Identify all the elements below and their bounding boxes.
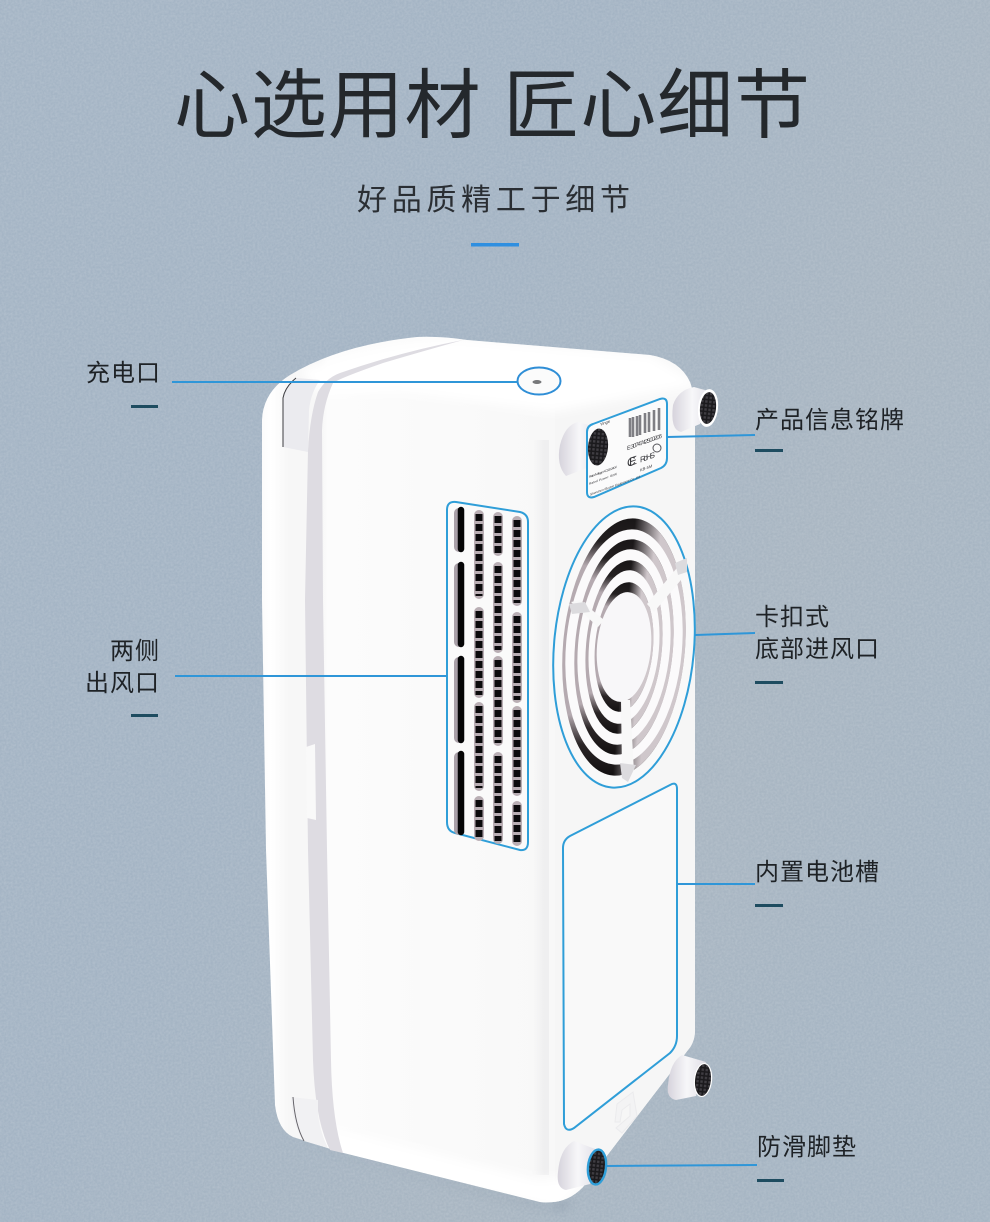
nameplate text: E 3074742500206: [627, 433, 663, 452]
callout: 两侧出风口: 两侧: [110, 638, 160, 665]
nameplate: [586, 399, 667, 497]
callout: 充电口: 充电口: [86, 360, 161, 387]
callout: 卡扣式底部进风口: 卡扣式: [755, 604, 830, 631]
grille rings: [552, 513, 696, 781]
foot: back upper: [672, 387, 720, 432]
charging port: [518, 368, 560, 394]
callout: 内置电池槽: [677, 859, 880, 907]
solid slots: [459, 510, 461, 832]
subtitle: 好品质精工于细节: [357, 184, 630, 217]
barcode: [630, 408, 659, 437]
callout: 两侧出风口: 出风口: [85, 670, 160, 697]
nameplate foot: [586, 428, 610, 466]
side seam notch: [306, 744, 316, 820]
body shell: [262, 337, 695, 1202]
battery compartment: [563, 784, 677, 1130]
nameplate text: RoHS: [640, 450, 655, 465]
side seam band: [305, 340, 463, 1153]
title accent bar: [471, 243, 519, 246]
fan intake grille: [542, 500, 706, 794]
upper side notch: [283, 378, 320, 452]
callout: 充电口: [86, 360, 518, 408]
nameplate text: Shenzhen Electric Equipment Co.,Ltd: [590, 475, 640, 497]
foot: back lower: [668, 1055, 713, 1100]
vent outline: [447, 502, 528, 850]
grille outline: [542, 500, 706, 794]
body highlights: [300, 339, 700, 1210]
nameplate text: CE: [627, 453, 637, 470]
nameplate text: Rated Voltage: AC220-240V: [589, 465, 618, 479]
callout: 防滑脚垫: 防滑脚垫: [757, 1134, 857, 1161]
nameplate text: Rated Power: 80W: [589, 472, 618, 486]
callout: 卡扣式底部进风口: [695, 604, 880, 684]
nameplate certification mark: [653, 444, 661, 452]
callout: 内置电池槽: 内置电池槽: [755, 859, 880, 886]
nameplate text: Yinge: [600, 418, 611, 427]
body shadow: [293, 1142, 575, 1210]
callout: 卡扣式底部进风口: 底部进风口: [755, 636, 880, 663]
nameplate text: KB-5M: [640, 463, 653, 473]
callout: 产品信息铭牌: 产品信息铭牌: [755, 407, 905, 434]
grille struts: [569, 558, 687, 782]
title: 心选用材 匠心细节: [174, 64, 810, 149]
bottom clip: [615, 1092, 637, 1133]
callout: 防滑脚垫: [605, 1134, 857, 1182]
product: dehumidifier body: [262, 337, 720, 1210]
nameplate text: [589, 400, 663, 497]
callout: 两侧出风口: [85, 638, 447, 717]
vent panel: [447, 502, 528, 850]
callout: 产品信息铭牌: [667, 407, 905, 452]
foot: front upper: [559, 422, 600, 476]
lower side notch: [291, 1097, 328, 1148]
foot: front lower: [558, 1141, 608, 1190]
ribbed slots: [479, 514, 517, 843]
